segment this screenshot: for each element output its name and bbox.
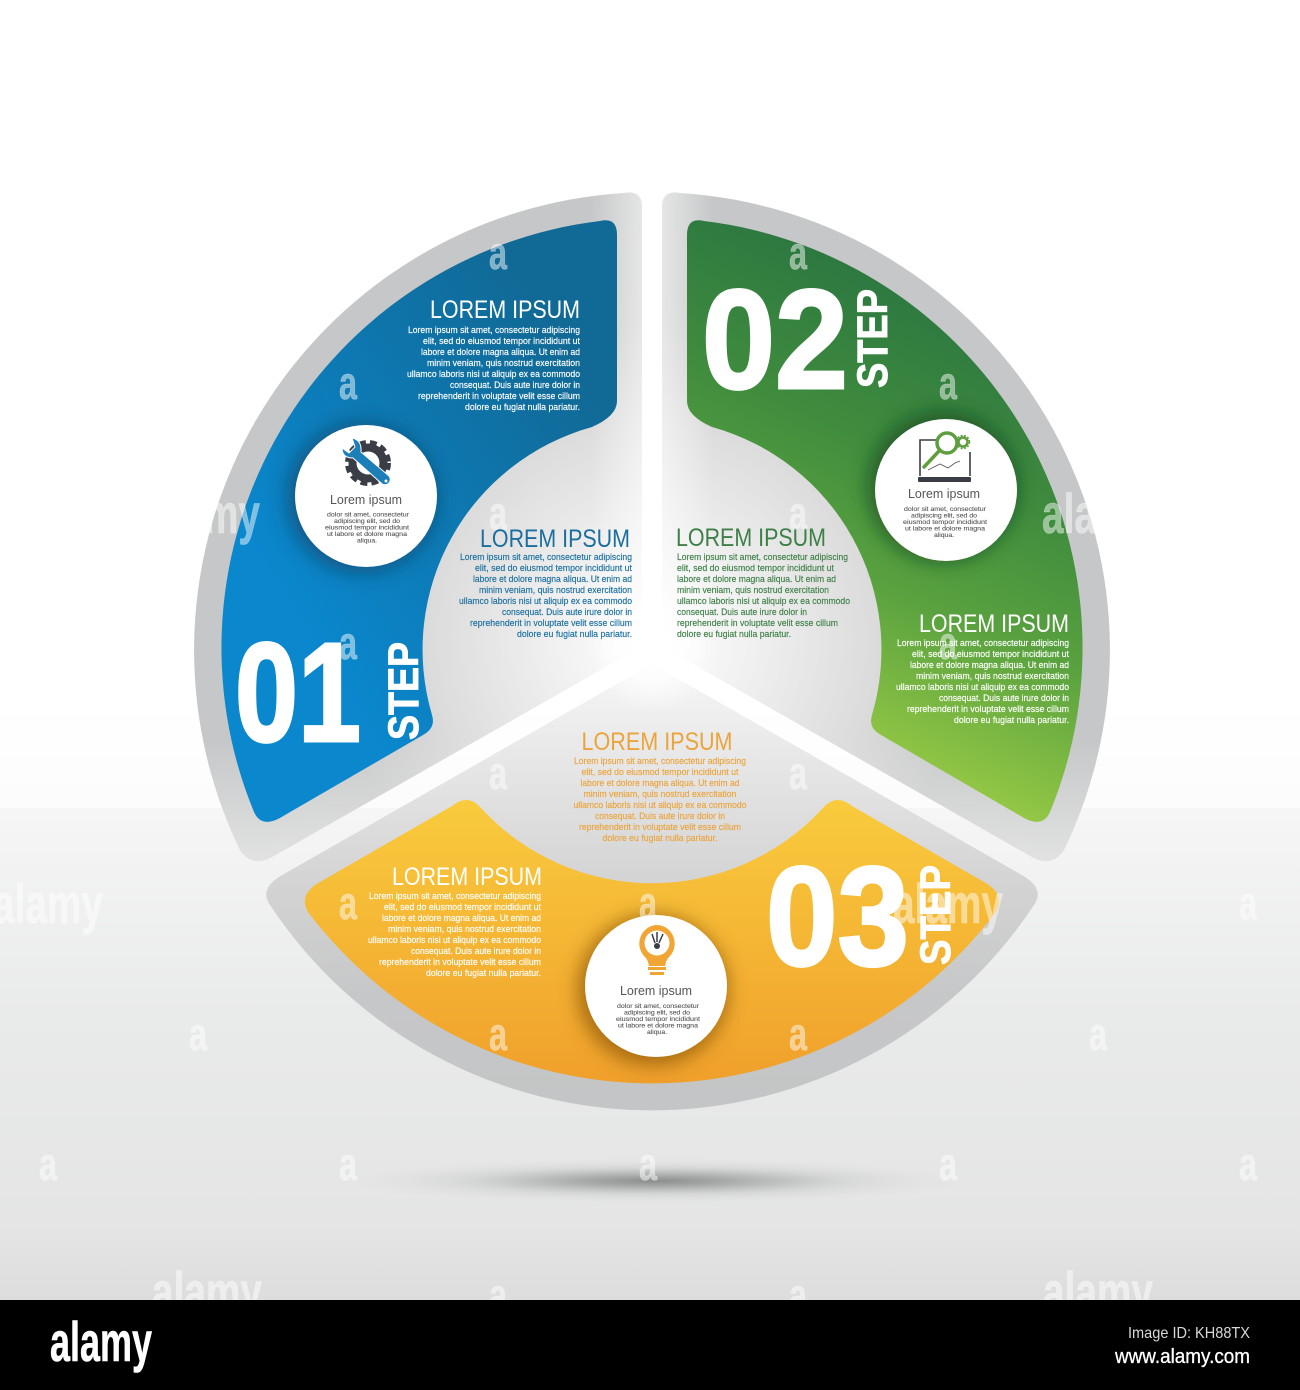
watermarks: a — [189, 1008, 207, 1060]
watermarks: a — [789, 1269, 807, 1321]
watermarks: a — [789, 487, 807, 539]
watermarks — [0, 227, 1257, 1323]
watermarks: a — [39, 1138, 57, 1190]
badge: step 2 analysis: eiusmod tempor incididunt — [903, 519, 987, 526]
badge: step 3 idea: dolor sit amet, consectetur — [617, 1003, 700, 1010]
panel: step 2 gray segment — [662, 193, 1110, 861]
watermarks: alamy — [150, 482, 260, 545]
watermarks: a — [1089, 1008, 1107, 1060]
text block: step 1 inner: minim veniam, quis nostrud exercitation — [479, 584, 632, 595]
text block: step 3 outer: elit, sed do eiusmod tempor incididunt ut — [384, 901, 541, 912]
badge: step 2 analysis: dolor sit amet, consectetur — [904, 506, 987, 513]
text block: step 2 inner: dolore eu fugiat nulla pariatur. — [677, 628, 791, 639]
text block: step 1 inner: Lorem ipsum sit amet, consectetur adipiscing — [460, 551, 632, 562]
text block: step 2 inner: labore et dolore magna aliqua. Ut enim ad — [677, 573, 836, 584]
text block: step 3 inner: labore et dolore magna aliqua. Ut enim ad — [580, 777, 740, 788]
step label 1: STEP — [380, 642, 428, 740]
footer bar — [0, 1300, 1300, 1390]
badge: step 3 idea: aliqua. — [647, 1029, 667, 1036]
text block: step 3 inner: LOREM IPSUM — [582, 728, 732, 756]
text block: step 3 outer: LOREM IPSUM — [392, 863, 542, 891]
text block: step 1 inner: labore et dolore magna aliqua. Ut enim ad — [473, 573, 632, 584]
text block: step 1 outer: reprehenderit in voluptate velit esse cillum — [418, 390, 580, 401]
panel: step 2 green shape — [687, 220, 1083, 822]
ground shadow — [325, 1157, 985, 1205]
text block: step 1 outer: dolore eu fugiat nulla pariatur. — [465, 401, 580, 412]
text block: step 1 inner — [459, 525, 632, 639]
text block: step 3 outer: consequat. Duis aute irure dolor in — [411, 945, 541, 956]
badge: step 1 tools — [286, 422, 438, 574]
text block: step 2 inner: reprehenderit in voluptate velit esse cillum — [677, 617, 838, 628]
badge: step 2 analysis: aliqua. — [934, 532, 954, 539]
step number 01: 01 — [235, 613, 361, 771]
text block: step 2 inner: LOREM IPSUM — [676, 524, 826, 552]
text block: step 2 outer: minim veniam, quis nostrud exercitation — [916, 670, 1069, 681]
text block: step 2 inner — [676, 524, 850, 639]
text block: step 2 outer: elit, sed do eiusmod tempor incididunt ut — [912, 648, 1069, 659]
watermarks: alamy — [1042, 482, 1152, 545]
text block: step 2 inner: ullamco laboris nisi ut aliquip ex ea commodo — [677, 595, 850, 606]
watermarks: a — [339, 617, 357, 669]
text block: step 2 outer: LOREM IPSUM — [919, 610, 1069, 638]
icon: laptop with magnifier — [918, 433, 971, 482]
text block: step 3 inner: Lorem ipsum sit amet, consectetur adipiscing — [574, 755, 746, 766]
step number 03: 03 — [766, 837, 909, 995]
panel: step 3 gray segment — [266, 664, 1038, 1110]
text block: step 2 outer: labore et dolore magna aliqua. Ut enim ad — [910, 659, 1069, 670]
watermarks: a — [939, 1138, 957, 1190]
text block: step 3 inner: ullamco laboris nisi ut aliquip ex ea commodo — [574, 799, 746, 810]
watermarks: a — [489, 1269, 507, 1321]
badge: step 1 tools: eiusmod tempor incididunt — [325, 524, 409, 532]
panel: step 3 yellow shape — [305, 800, 999, 1083]
text block: step 2 outer: reprehenderit in voluptate velit esse cillum — [907, 703, 1069, 714]
text block: step 3 inner: elit, sed do eiusmod tempor incididunt ut — [582, 766, 739, 777]
badge: step 2 analysis: ut labore et dolore magna — [905, 526, 985, 532]
watermarks: alamy — [1043, 1260, 1153, 1323]
image id: Image ID: KH88TX — [1128, 1325, 1250, 1342]
text block: step 2 inner: elit, sed do eiusmod tempor incididunt ut — [677, 562, 834, 573]
badge: step 1 tools: aliqua. — [357, 538, 377, 544]
text block: step 1 inner: elit, sed do eiusmod tempor incididunt ut — [475, 562, 632, 573]
text block: step 1 outer: Lorem ipsum sit amet, consectetur adipiscing — [408, 324, 580, 335]
panel: step 1 blue shape — [221, 220, 617, 822]
text block: step 3 outer: ullamco laboris nisi ut aliquip ex ea commodo — [368, 934, 541, 945]
badge: step 3 idea: ut labore et dolore magna — [618, 1022, 698, 1030]
watermarks: alamy — [152, 1260, 262, 1323]
text block: step 3 inner: dolore eu fugiat nulla pariatur. — [602, 832, 718, 843]
watermarks: a — [489, 1008, 507, 1060]
text block: step 1 outer: minim veniam, quis nostrud exercitation — [427, 357, 580, 368]
text block: step 1 inner: reprehenderit in voluptate velit esse cillum — [470, 617, 632, 628]
text block: step 2 inner: minim veniam, quis nostrud exercitation — [677, 584, 829, 595]
watermarks: a — [639, 877, 657, 929]
text block: step 1 outer — [407, 296, 580, 412]
text block: step 1 outer: consequat. Duis aute irure dolor in — [450, 379, 580, 390]
text block: step 3 inner: minim veniam, quis nostrud exercitation — [584, 788, 736, 799]
step label 2: STEP — [849, 289, 897, 388]
text block: step 1 inner: consequat. Duis aute irure dolor in — [502, 606, 632, 617]
text block: step 3 outer: minim veniam, quis nostrud exercitation — [388, 923, 541, 934]
watermarks: a — [489, 227, 507, 279]
badge: step 3 idea: eiusmod tempor incididunt — [616, 1016, 700, 1023]
badge: step 1 tools: adipiscing elit, sed do — [334, 518, 400, 525]
step number 02: 02 — [702, 260, 848, 418]
text block: step 2 outer: ullamco laboris nisi ut aliquip ex ea commodo — [896, 681, 1069, 692]
text block: step 3 outer: reprehenderit in voluptate velit esse cillum — [379, 956, 541, 967]
site address: www.alamy.com — [1114, 1346, 1250, 1368]
watermarks: a — [1239, 877, 1257, 929]
badge: step 2 analysis: Lorem ipsum — [908, 487, 980, 501]
badge: step 2 analysis: adipiscing elit, sed do — [911, 512, 977, 520]
watermarks: a — [339, 1138, 357, 1190]
badge: step 1 tools: ut labore et dolore magna — [327, 531, 407, 538]
text block: step 3 inner: reprehenderit in voluptate velit esse cillum — [579, 821, 741, 832]
watermarks: a — [489, 487, 507, 539]
text block: step 1 outer: elit, sed do eiusmod tempor incididunt ut — [423, 335, 580, 346]
text block: step 2 outer: Lorem ipsum sit amet, consectetur adipiscing — [897, 637, 1069, 648]
watermarks: a — [789, 1008, 807, 1060]
text block: step 3 outer: dolore eu fugiat nulla pariatur. — [426, 967, 541, 978]
badge: step 1 tools: dolor sit amet, consectetur — [327, 512, 410, 518]
text block: step 2 inner: consequat. Duis aute irure dolor in — [677, 606, 807, 617]
text block: step 2 outer: dolore eu fugiat nulla pariatur. — [954, 714, 1069, 725]
text block: step 1 outer: labore et dolore magna aliqua. Ut enim ad — [421, 346, 580, 357]
badge: step 3 idea: Lorem ipsum — [620, 984, 692, 998]
text block: step 3 outer: labore et dolore magna aliqua. Ut enim ad — [382, 912, 541, 923]
footer logo: alamy — [50, 1310, 152, 1373]
badge: step 3 idea — [577, 914, 729, 1066]
watermarks: a — [639, 1138, 657, 1190]
step label 3: STEP — [912, 865, 960, 965]
center glow — [590, 590, 714, 714]
text block: step 3 outer — [368, 863, 542, 978]
watermarks: a — [939, 357, 957, 409]
icon: gear and wrench — [342, 438, 390, 485]
text block: step 3 inner — [574, 728, 746, 843]
badge: step 2 analysis — [867, 411, 1019, 563]
text block: step 1 outer: ullamco laboris nisi ut aliquip ex ea commodo — [407, 368, 580, 379]
text block: step 2 inner: Lorem ipsum sit amet, consectetur adipiscing — [677, 551, 848, 562]
watermarks: a — [339, 357, 357, 409]
text block: step 1 inner: dolore eu fugiat nulla pariatur. — [517, 628, 632, 639]
text block: step 2 outer: consequat. Duis aute irure dolor in — [939, 692, 1069, 703]
watermarks: alamy — [893, 872, 1003, 935]
badge: step 1 tools: Lorem ipsum — [330, 493, 402, 507]
icon: light bulb — [639, 925, 675, 975]
panel: step 1 gray segment — [194, 193, 642, 861]
text block: step 2 outer — [896, 610, 1069, 725]
watermarks: a — [939, 617, 957, 669]
watermarks: a — [789, 227, 807, 279]
watermarks: a — [789, 747, 807, 799]
text block: step 1 outer: LOREM IPSUM — [430, 296, 580, 324]
watermarks: a — [489, 747, 507, 799]
text block: step 3 outer: Lorem ipsum sit amet, consectetur adipiscing — [369, 890, 541, 901]
text block: step 1 inner: ullamco laboris nisi ut aliquip ex ea commodo — [459, 595, 632, 606]
watermarks: a — [1239, 1138, 1257, 1190]
text block: step 1 inner: LOREM IPSUM — [480, 525, 630, 553]
badge: step 3 idea: adipiscing elit, sed do — [624, 1010, 690, 1016]
watermarks: a — [339, 877, 357, 929]
text block: step 3 inner: consequat. Duis aute irure dolor in — [595, 810, 725, 821]
